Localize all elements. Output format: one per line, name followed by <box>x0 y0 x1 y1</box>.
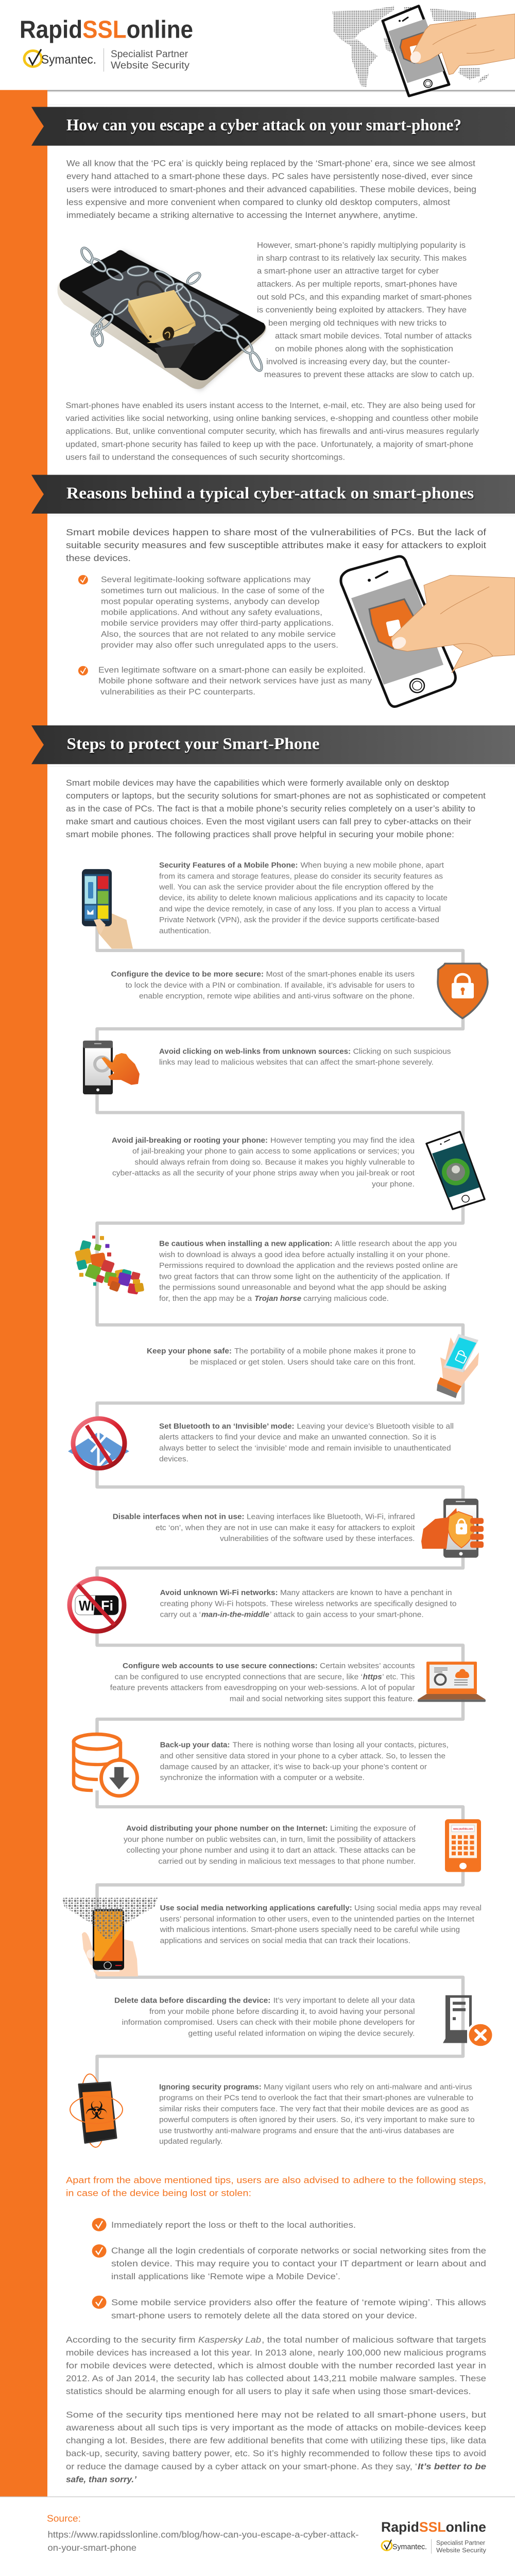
brand name: RapidSSLonline <box>381 2519 486 2535</box>
heading ribbon: steps <box>31 725 515 767</box>
step text: two great factors that can throw some light on the authenticity of the application. If <box>159 1273 450 1281</box>
item: remote wiping: Some mobile service providers also offer the feature of ‘remote wiping’. This allows <box>111 2298 486 2308</box>
bullet text <box>98 666 372 697</box>
step text: powerful computers is often ignored by their users. So, it’s very important to make sure to <box>159 2116 475 2124</box>
step text: Using social media apps may reveal <box>354 1904 482 1912</box>
item: remote wiping: smart-phone users to remotely delete all the data stored on your device. <box>111 2311 417 2320</box>
orange lead-in text: Apart from the above mentioned tips, users are also advised to adhere to the following steps, <box>66 2175 486 2185</box>
bullet: legitimate software <box>78 666 372 697</box>
paragraph: conclusion: changing a lot. Besides, there are few additional benefits that come with utilizing these tips, like data <box>66 2436 487 2446</box>
step text: Ignoring security programs: <box>159 2083 262 2091</box>
bullet text: Also, the sources that are not related to any mobile service <box>101 630 336 639</box>
icon: no wi-fi sign: Fi <box>101 1598 113 1614</box>
source url: https://www.rapidsslonline.com/blog/how-can-you-escape-a-cyber-attack- <box>48 2530 359 2540</box>
step text <box>159 1047 451 1066</box>
step text: Permissions required to download the application and the reviews posted online are <box>159 1262 458 1270</box>
source url: on-your-smart-phone <box>48 2543 136 2553</box>
step text <box>160 1589 457 1619</box>
icon: large phone with hand <box>341 556 515 707</box>
step text: Leaving your device’s Bluetooth visible to all <box>297 1422 454 1431</box>
step text: feature prevents attackers from eavesdropping on your web-sessions. A lot of popular <box>110 1684 415 1692</box>
step text <box>111 971 415 1001</box>
step 7: bluetooth invisible <box>68 1418 454 1468</box>
icon: orange keypad phone: www.yourlinks.com <box>453 1828 473 1831</box>
partner label: Specialist Partner <box>436 2540 485 2546</box>
step text <box>160 1741 449 1782</box>
step 13: social media <box>62 1898 482 1976</box>
item: report the loss <box>92 2218 356 2231</box>
step 2: configure the device <box>111 963 488 1018</box>
item: change credentials <box>92 2244 486 2281</box>
paragraph: conclusion: back-up, security, saving battery power, etc. So it’s highly recommended to follow these tips to avoid <box>66 2449 486 2459</box>
heading text: Steps to protect your Smart-Phone <box>67 735 319 753</box>
paragraph: conclusion: or reduce the damage caused by a cyber attack on your smart-phone. As they say, ‘ <box>66 2462 417 2471</box>
step 4: jail-breaking <box>112 1131 485 1209</box>
step text: links may lead to malicious websites that can affect the smart-phone severely. <box>159 1059 434 1066</box>
step text: Keep your phone safe: <box>147 1347 232 1355</box>
paragraph: popularity versus security: a smart-phone user an attractive target for cyber <box>257 267 439 276</box>
icon: phone with tapping hand <box>83 1041 140 1094</box>
paragraph: popularity versus security: is conveniently being exploited by attackers. They have <box>257 306 467 315</box>
step text: Back-up your data: <box>160 1741 230 1749</box>
paragraph: conclusion: awareness about all such tips is very important as the mode of attacks on mobile-devices keep <box>66 2423 486 2432</box>
icon: tilted phone with green splat <box>426 1131 485 1209</box>
paragraph: popularity versus security: on mobile phones along with the sophistication <box>275 345 453 353</box>
header rule <box>47 90 515 105</box>
step text: and wipe the device remotely, in case of any loss. If you plan to access a Virtual <box>159 905 441 913</box>
step text: Leaving interfaces like Bluetooth, Wi-Fi, infrared <box>247 1513 415 1521</box>
paragraph: popularity versus security: been merging old techniques with new tricks to <box>268 319 447 328</box>
icon: check <box>78 575 88 584</box>
step text: Use social media networking applications carefully: <box>160 1904 352 1912</box>
icon: phone with biohazard <box>70 2073 123 2148</box>
paragraph: kaspersky statistics: mobile devices has increased a lot this year. In 2013 alone, nearly 100,000 new malicious programs <box>66 2348 486 2358</box>
step text: your phone number on public websites can, in turn, limit the possibility of attackers <box>124 1836 416 1844</box>
intro paragraph: less expensive and more convenient when compared to clunky old desktop computers, almost <box>66 197 450 207</box>
icon: laptop <box>418 1662 486 1702</box>
partner label: Website Security <box>111 60 190 71</box>
icon: shield with lock <box>438 963 488 1018</box>
step text: Be cautious when installing a new application: <box>159 1240 332 1248</box>
paragraph: kaspersky statistics: for mobile devices were detected, which is almost double with the number recorded last year in <box>66 2361 486 2370</box>
icon: cluster of app tiles <box>75 1235 144 1295</box>
brand name: RapidSSLonline <box>20 16 193 43</box>
paragraph: kaspersky statistics: 2012. As of Jan 2014, the security lab has collected about 143,211 mobile malware samples. These <box>66 2374 486 2383</box>
step text: from your mobile phone before discarding it, to avoid having your personal <box>149 2008 415 2016</box>
step text: Configure the device to be more secure: <box>111 971 264 979</box>
icon: no wi-fi sign: Wi <box>79 1598 94 1614</box>
paragraph: instant access <box>66 401 479 462</box>
step 15: security programs <box>70 2073 475 2148</box>
item: remote wiping <box>92 2296 486 2320</box>
icon: hand holding locked phone <box>437 1334 479 1398</box>
chain links <box>79 246 264 372</box>
step text: enable encryption, remote wipe abilities and anti-virus software on the phone. <box>139 992 415 1001</box>
partner label: Specialist Partner <box>111 48 188 60</box>
icon: database with download badge <box>74 1734 137 1796</box>
step text: etc ‘on’, when they are not in use can make it easy for attackers to exploit <box>156 1524 415 1532</box>
step text: with malicious intentions. Smart-phone users specially need to be careful while using <box>160 1926 460 1934</box>
bullet text: Mobile phone software and their network services have just as many <box>98 677 372 686</box>
step text <box>110 1662 415 1703</box>
paragraph: popularity versus security: out sold PCs, and this expanding market of smart-phones <box>257 293 472 302</box>
icon: phone with app tiles <box>82 869 133 948</box>
bullet text: sometimes turn out malicious. In the case of some of the <box>101 587 324 595</box>
paragraph: instant access: varied activities like social networking, using online banking services, e-shopping and countless other mobile <box>66 414 478 423</box>
step text: The portability of a mobile phone makes it prone to <box>234 1347 416 1355</box>
step 6: keep your phone safe <box>147 1334 479 1398</box>
step text: well. You can ask the service provider about the file encryption offered by the <box>159 884 434 891</box>
paragraph: vulnerabilities: suitable security measures and few susceptible attributes make it easy for attackers to exploit <box>66 540 486 550</box>
paragraph: popularity versus security: attackers. As per multiple reports, smart-phones have <box>257 280 457 289</box>
step text <box>159 861 448 935</box>
partner label <box>436 2540 486 2554</box>
paragraph: conclusion: safe, than sorry.’ <box>66 2475 136 2484</box>
step text: mail and social networking sites support this feature. <box>230 1695 415 1703</box>
step text: creating phony Wi-Fi hotspots. These wireless networks are specifically designed to <box>160 1600 457 1608</box>
icon: server tower with x badge <box>443 1995 492 2046</box>
heading ribbon: reasons <box>31 475 515 516</box>
bullet text: most popular operating systems, anybody can develop <box>101 598 320 606</box>
step text: Limiting the exposure of <box>330 1825 416 1833</box>
step text: Security Features of a Mobile Phone: <box>159 861 298 870</box>
step 11: back-up <box>74 1734 449 1796</box>
step text: carried out by sending in malicious text messages to that phone number. <box>158 1858 416 1866</box>
dotted world map <box>332 6 489 87</box>
step text: ’ attack to gain access to your smart-phone. <box>270 1611 424 1619</box>
step 14: delete data <box>114 1995 492 2046</box>
step text <box>147 1347 416 1366</box>
step text <box>159 1240 458 1303</box>
step text: carry out a ‘ <box>160 1611 201 1619</box>
step text <box>159 2083 475 2146</box>
intro paragraph: every hand attached to a smart-phone these days. PC sales have persistently nose-dived, ever since <box>66 172 473 181</box>
paragraph: conclusion: It’s better to be <box>418 2462 486 2471</box>
footer logo <box>381 2519 486 2554</box>
step text: the permissions sound unreasonable and beyond what the app should be asking <box>159 1284 447 1292</box>
bullet: malicious applications <box>78 575 338 650</box>
partner label <box>111 48 190 71</box>
orange lead-in text <box>66 2175 486 2198</box>
paragraph: instant access: users fail to understand the consequences of such security shortcomings. <box>66 453 345 462</box>
bullet text: mobile applications. And without any safety evaluations, <box>101 608 322 617</box>
step 9: wi-fi networks <box>70 1579 457 1631</box>
icon: symantec check <box>382 2540 392 2550</box>
step text: and other sensitive data stored in your phone to a cyber attack. So, to lessen the <box>160 1752 445 1760</box>
intro paragraph: users were introduced to smart-phones and their advanced capabilities. These mobile devices, being <box>66 184 476 194</box>
step text: use trustworthy anti-malware programs and ensure that the anti-virus databases are <box>159 2127 454 2135</box>
icon: phone with biohazard: ☣ <box>85 2096 108 2125</box>
partner label: Website Security <box>436 2547 486 2554</box>
step text <box>112 1137 415 1189</box>
item: change credentials: install applications like ‘Remote wipe a Mobile Device’. <box>111 2272 340 2281</box>
paragraph: vulnerabilities <box>66 527 486 563</box>
icon: symantec check <box>24 49 42 66</box>
step text: of jail-breaking your phone to gain access to some applications or services; you <box>132 1147 415 1156</box>
step text <box>113 1513 415 1543</box>
item: change credentials: Change all the login credentials of corporate networks or social networking sites from the <box>111 2246 486 2256</box>
item: change credentials: stolen device. This may require you to contact your IT department or learn about and <box>111 2259 486 2268</box>
intro paragraph: immediately became a striking alternative to accessing the Internet anywhere, anytime. <box>66 210 418 220</box>
connector line <box>97 925 463 2088</box>
step text: collecting your phone number and using it to dart an attack. These attacks can be <box>127 1846 416 1855</box>
paragraph: smart choices <box>66 778 486 839</box>
symantec name: Symantec. <box>392 2543 427 2551</box>
orange side stripe <box>0 90 47 2497</box>
paragraph: vulnerabilities: Smart mobile devices happen to share most of the vulnerabilities of PCs. But the lack of <box>66 527 486 537</box>
icon: no wi-fi sign <box>70 1579 124 1631</box>
step text: Clicking on such suspicious <box>353 1047 451 1056</box>
paragraph: popularity versus security: measures to prevent these attacks are slow to catch up. <box>264 370 474 379</box>
step text: updated regularly. <box>159 2138 222 2146</box>
step text: should always refrain from doing so. Because it makes you highly vulnerable to <box>135 1159 415 1166</box>
bullet text: Several legitimate-looking software applications may <box>101 575 311 584</box>
paragraph: popularity versus security: attack smart mobile devices. Total number of attacks <box>275 332 472 341</box>
step text: synchronize the information with a computer or a website. <box>160 1774 365 1782</box>
symantec name: Symantec. <box>41 53 96 66</box>
step text <box>124 1825 416 1866</box>
step text: ’ etc. This <box>382 1673 415 1681</box>
step text: applications and services on social media that can track their locations. <box>160 1937 410 1945</box>
paragraph: popularity versus security: involved is increasing every day, but the counter- <box>266 358 450 366</box>
step text: from its camera and storage features, please do consider its security features as <box>159 872 443 880</box>
source <box>47 2513 359 2553</box>
paragraph: conclusion <box>66 2410 487 2484</box>
step text: Configure web accounts to use secure connections: <box>123 1662 318 1670</box>
step text: It’s very important to delete all your data <box>273 1997 415 2005</box>
step text: alerts attackers to find your device and make an unwanted connection. So it is <box>159 1433 436 1442</box>
bullet text: provider may also offer such unregulated apps to the users. <box>101 641 338 650</box>
paragraph: popularity versus security <box>257 241 474 379</box>
step text: be misplaced or get stolen. Users should take care on this front. <box>190 1359 416 1366</box>
step text: When buying a new mobile phone, apart <box>301 861 444 870</box>
icon: phone with shield in hand <box>421 1499 484 1558</box>
step text: There is nothing worse than losing all your contacts, pictures, <box>233 1741 449 1749</box>
source label: Source: <box>47 2513 81 2523</box>
step text: Certain websites’ accounts <box>320 1662 415 1670</box>
step text: can be configured to use encrypted connections that are secure, like ‘ <box>115 1673 363 1681</box>
bullet text: mobile service providers may offer third-party applications. <box>101 619 334 628</box>
step text: Many attackers are known to have a penchant in <box>280 1589 452 1597</box>
paragraph: kaspersky statistics: According to the security firm <box>66 2335 196 2345</box>
paragraph: kaspersky statistics <box>66 2335 486 2396</box>
step text: Avoid clicking on web-links from unknown sources: <box>159 1047 351 1056</box>
step text: always better to select the ‘invisible’ mode and remain invisible to unauthenticated <box>159 1445 451 1452</box>
step text: device, its ability to delete known malicious applications and its capacity to locate <box>159 894 448 903</box>
bullet text <box>101 575 338 650</box>
heading ribbon: escape a cyber attack <box>31 107 515 146</box>
step text: your phone. <box>372 1180 415 1189</box>
paragraph: smart choices: computers or laptops, but the security solutions for smart-phones are not as sophisticated or competent <box>66 791 486 801</box>
paragraph: instant access: Smart-phones have enabled its users instant access to the Internet, e-mail, etc. They are also being used for <box>66 401 475 410</box>
paragraph: kaspersky statistics: statistics should be alarming enough for all users to play it safe when using those smart-devices. <box>66 2386 471 2396</box>
photo: phone locked with chain and padlock <box>58 246 266 391</box>
step text: Avoid jail-breaking or rooting your phone: <box>112 1137 268 1145</box>
step 1: security features <box>82 861 448 948</box>
step 3: web-links <box>83 1041 451 1094</box>
step text: Avoid unknown Wi-Fi networks: <box>160 1589 278 1597</box>
step text: getting useful related information on wiping the device securely. <box>188 2029 415 2038</box>
source url <box>48 2530 359 2553</box>
orange lead-in text: in case of the device being lost or stolen: <box>66 2188 251 2198</box>
list: lost or stolen steps <box>92 2218 486 2320</box>
step text: vulnerabilities of the software used by these interfaces. <box>220 1535 415 1543</box>
paragraph: instant access: updated, smart-phone security has failed to keep up with the pace. Unfortunately, a majority of smart-phone <box>66 440 473 449</box>
icon: check <box>78 666 88 675</box>
item: report the loss: Immediately report the loss or theft to the local authorities. <box>111 2220 356 2230</box>
step text: Private Network (VPN), ask the provider if the device supports certificate-based <box>159 916 439 924</box>
step text: authentication. <box>159 927 211 935</box>
step text: Disable interfaces when not in use: <box>113 1513 245 1521</box>
icon: no bluetooth sign <box>68 1418 129 1468</box>
step text: similar risks their computers face. The very fact that their mobile devices are as good as <box>159 2105 469 2113</box>
step text: devices. <box>159 1455 188 1464</box>
paragraph: smart choices: make smart and cautious choices. Even the most vigilant users can fall prey to cyber-attacks on their <box>66 817 471 826</box>
step 5: new application <box>75 1235 458 1303</box>
bullet text: Even legitimate software on a smart-phone can easily be exploited. <box>98 666 366 674</box>
step 8: disable interfaces <box>113 1499 484 1558</box>
step text: programs on their PCs tend to overlook the fact that their smart-phones are vulnerable to <box>159 2094 473 2103</box>
paragraph: instant access: applications. But, unlike conventional computer security, which has firewalls and anti-virus measures regularly <box>66 427 479 436</box>
step text: users’ personal information to other users, even to the unintended parties on the Internet <box>160 1916 474 1923</box>
intro paragraph: We all know that the ‘PC era’ is quickly being replaced by the ‘Smart-phone’ era, since we see almost <box>66 159 475 168</box>
paragraph: kaspersky statistics: Kaspersky Lab <box>198 2335 261 2345</box>
paragraph: conclusion: Some of the security tips mentioned here may not be related to all smart-phone users, but <box>66 2410 486 2419</box>
step text: Avoid distributing your phone number on the Internet: <box>126 1825 328 1833</box>
step text: for, then the app may be a <box>159 1295 252 1303</box>
header logo <box>20 16 193 72</box>
step text: man-in-the-middle <box>201 1611 269 1619</box>
step text <box>160 1904 482 1945</box>
step text: damage caused by an attacker, it’s wise to back-up your phone’s content or <box>160 1763 427 1771</box>
icon: phone with hand <box>383 6 515 96</box>
paragraph: kaspersky statistics: , the total number of malicious software that targets <box>262 2335 486 2345</box>
icon: orange keypad phone <box>445 1819 481 1872</box>
step text <box>114 1997 415 2038</box>
paragraph: smart choices: smart mobile phones. The following practices shall prove helpful in securing your mobile phone: <box>66 829 454 839</box>
step text: carrying malicious code. <box>303 1295 389 1303</box>
step text <box>159 1422 454 1464</box>
heading text: How can you escape a cyber attack on your smart-phone? <box>66 116 461 134</box>
step text: information compromised. Users can check with their mobile phone developers for <box>122 2019 415 2027</box>
paragraph: smart choices: as in the case of PCs. The fact is that a mobile phone’s security relies completely on a user’s ability to <box>66 804 475 814</box>
padlock <box>128 281 196 343</box>
step text: cyber-attacks as all the security of your phone strips away when you jail-break or root <box>112 1170 415 1178</box>
step text: Trojan horse <box>254 1295 301 1303</box>
step text: However tempting you may find the idea <box>270 1137 415 1145</box>
step 12: phone number <box>124 1819 481 1872</box>
heading text: Reasons behind a typical cyber-attack on smart-phones <box>66 484 474 503</box>
step text: Many vigilant users who rely on anti-malware and anti-virus <box>264 2083 472 2091</box>
paragraph: popularity versus security: However, smart-phone’s rapidly multiplying popularity is <box>257 241 466 250</box>
paragraph: popularity versus security: in sharp contrast to its relatively lax security. This makes <box>257 254 467 263</box>
icon: phone with social icons funnel <box>62 1898 158 1976</box>
step 10: secure connections <box>110 1662 486 1703</box>
paragraph: smart choices: Smart mobile devices may have the capabilities which were formerly available only on desktop <box>66 778 449 788</box>
step text: https <box>363 1673 382 1681</box>
bullet text: vulnerabilities as their PC counterparts. <box>100 688 255 697</box>
step text: Delete data before discarding the device: <box>114 1997 271 2005</box>
step text: Most of the smart-phones enable its users <box>266 971 415 979</box>
paragraph: vulnerabilities: these devices. <box>66 553 131 563</box>
intro paragraph <box>66 159 476 220</box>
step text: to lock the device with a PIN or combination. If available, it’s advisable for users to <box>126 981 415 990</box>
step text: wish to download is always a good idea before actually installing it on your phone. <box>159 1251 450 1259</box>
step text: Set Bluetooth to an ‘Invisible’ mode: <box>159 1422 294 1431</box>
step text: A little research about the app you <box>335 1240 457 1248</box>
